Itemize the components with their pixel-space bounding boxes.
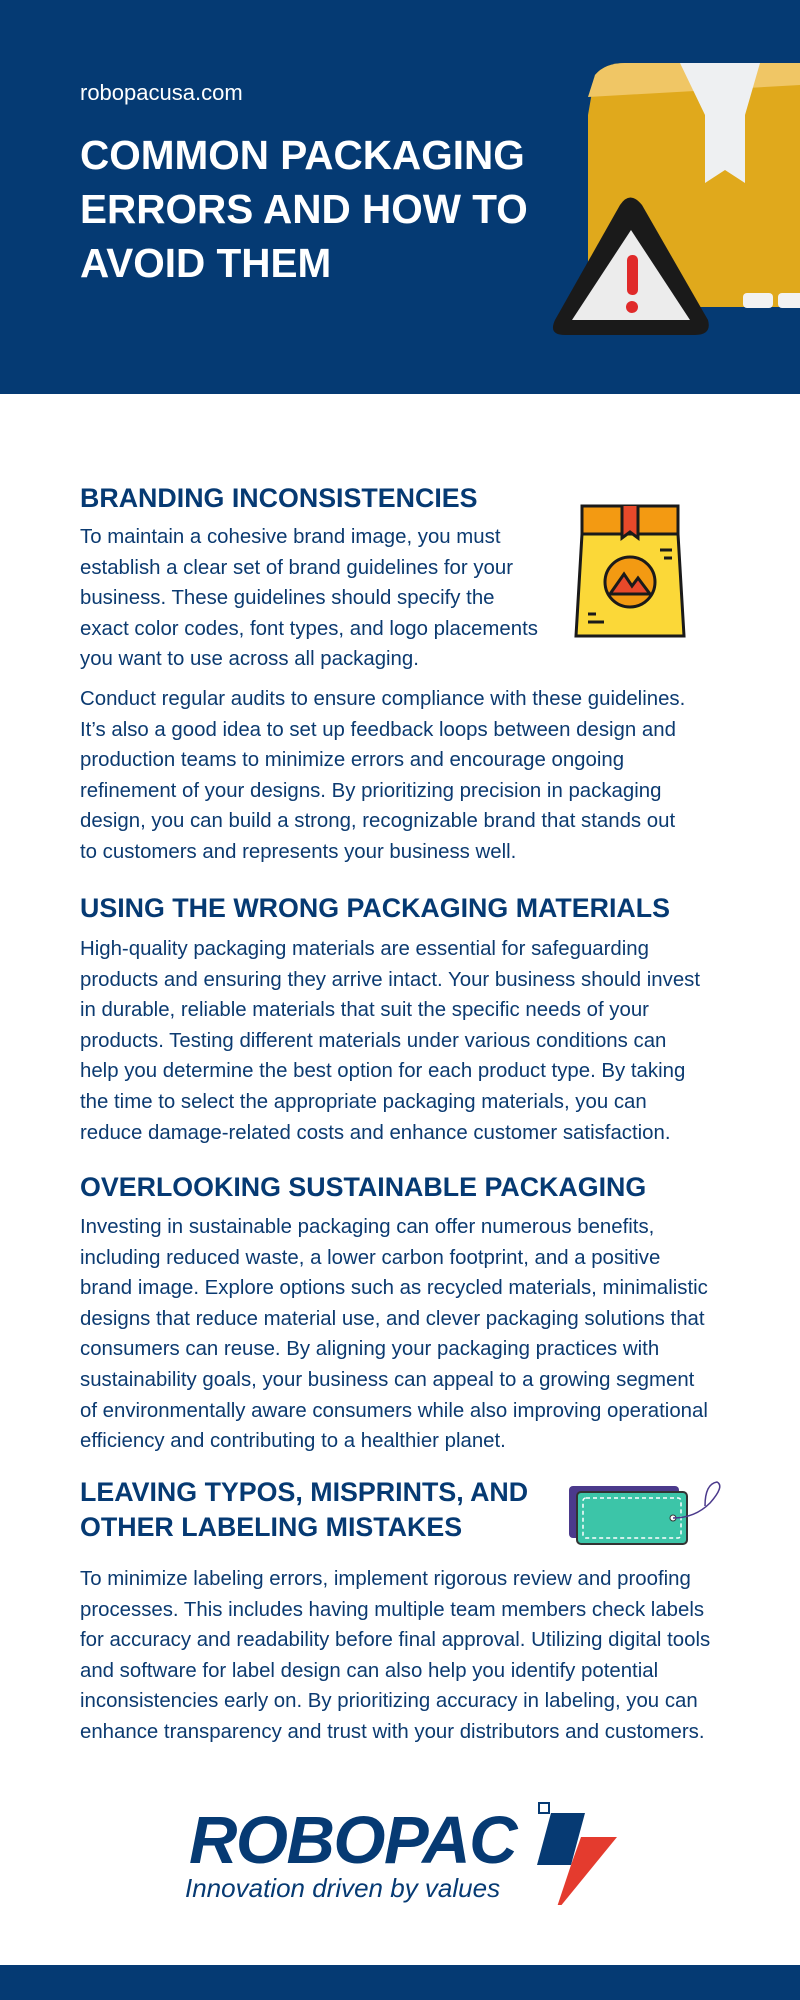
text: branding para 1: exact color codes, font types, and logo placements bbox=[80, 618, 538, 640]
text: materials: products. Testing different materials under various conditions can bbox=[80, 1030, 666, 1052]
text: sustainable: brand image. Explore options such as recycled materials, minimalistic bbox=[80, 1277, 708, 1299]
text: branding para 2: refinement of your designs. By prioritizing precision in packaging bbox=[80, 780, 661, 802]
heading: branding: BRANDING INCONSISTENCIES bbox=[80, 483, 478, 513]
text: branding para 2: production teams to minimize errors and encourage ongoing bbox=[80, 749, 624, 771]
text: labeling: processes. This includes having multiple team members check labels bbox=[80, 1599, 704, 1621]
title: COMMON PACKAGING bbox=[80, 132, 525, 178]
text: materials: reduce damage-related costs and enhance customer satisfaction. bbox=[80, 1122, 671, 1144]
text: labeling: and software for label design can also help you identify potential bbox=[80, 1660, 658, 1682]
header banner bbox=[0, 0, 800, 394]
icon: tag bbox=[569, 1481, 721, 1545]
heading: labeling: LEAVING TYPOS, MISPRINTS, AND bbox=[80, 1477, 528, 1507]
text: materials: High-quality packaging materials are essential for safeguarding bbox=[80, 938, 649, 960]
text: branding para 1 bbox=[80, 526, 538, 670]
heading: labeling bbox=[80, 1477, 528, 1542]
text: labeling: To minimize labeling errors, implement rigorous review and proofing bbox=[80, 1568, 691, 1590]
heading: labeling: OTHER LABELING MISTAKES bbox=[80, 1512, 462, 1542]
heading: wrong materials: USING THE WRONG PACKAGING MATERIALS bbox=[80, 893, 670, 923]
text: materials: the time to select the appropriate packaging materials, you can bbox=[80, 1091, 647, 1113]
heading: sustainable: OVERLOOKING SUSTAINABLE PACKAGING bbox=[80, 1172, 646, 1202]
text: branding para 1: you want to use across all packaging. bbox=[80, 648, 419, 670]
text: branding para 1: business. These guidelines should specify the bbox=[80, 587, 494, 609]
text: branding para 2 bbox=[80, 688, 685, 863]
text: sustainable: Investing in sustainable packaging can offer numerous benefits, bbox=[80, 1216, 654, 1238]
text: sustainable: consumers can reuse. By aligning your packaging practices with bbox=[80, 1338, 659, 1360]
text: materials bbox=[80, 938, 700, 1144]
website url: robopacusa.com bbox=[80, 80, 243, 105]
text: labeling bbox=[80, 1568, 710, 1743]
title: ERRORS AND HOW TO bbox=[80, 186, 528, 232]
text: sustainable: including reduced waste, a lower carbon footprint, and a positive bbox=[80, 1247, 660, 1269]
text: materials: products and ensuring they arrive intact. Your business should invest bbox=[80, 969, 700, 991]
text: labeling: enhance transparency and trust with your distributors and customers. bbox=[80, 1721, 704, 1743]
text: materials: help you determine the best option for each product type. By taking bbox=[80, 1060, 685, 1082]
text: branding para 2: design, you can build a strong, recognizable brand that stands out bbox=[80, 810, 675, 832]
title bbox=[80, 132, 528, 286]
text: materials: in durable, reliable materials that suit the specific needs of your bbox=[80, 999, 649, 1021]
logo: robopac: Innovation driven by values bbox=[185, 1873, 500, 1903]
footer bar bbox=[0, 1965, 800, 2000]
text: labeling: for accuracy and readability before final approval. Utilizing digital tools bbox=[80, 1629, 710, 1651]
title: AVOID THEM bbox=[80, 240, 331, 286]
icon: bag bbox=[574, 504, 686, 638]
logo: robopac bbox=[185, 1802, 617, 1905]
text: sustainable: designs that reduce material use, and clever packaging solutions that bbox=[80, 1308, 705, 1330]
text: branding para 1: To maintain a cohesive brand image, you must bbox=[80, 526, 500, 548]
text: branding para 2: Conduct regular audits to ensure compliance with these guidelines. bbox=[80, 688, 685, 710]
text: branding para 2: to customers and represents your business well. bbox=[80, 841, 516, 863]
text: branding para 1: establish a clear set of brand guidelines for your bbox=[80, 557, 513, 579]
text: sustainable: sustainability goals, your business can appeal to a growing segment bbox=[80, 1369, 694, 1391]
text: sustainable bbox=[80, 1216, 708, 1452]
text: sustainable: of environmentally aware consumers while also improving operational bbox=[80, 1400, 708, 1422]
icon: box with warning bbox=[553, 63, 800, 335]
logo: robopac: ROBOPAC bbox=[189, 1803, 516, 1878]
text: sustainable: efficiency and contributing to a healthier planet. bbox=[80, 1430, 506, 1452]
text: labeling: inconsistencies early on. By prioritizing accuracy in labeling, you can bbox=[80, 1690, 698, 1712]
text: branding para 2: It’s also a good idea to set up feedback loops between design and bbox=[80, 719, 676, 741]
